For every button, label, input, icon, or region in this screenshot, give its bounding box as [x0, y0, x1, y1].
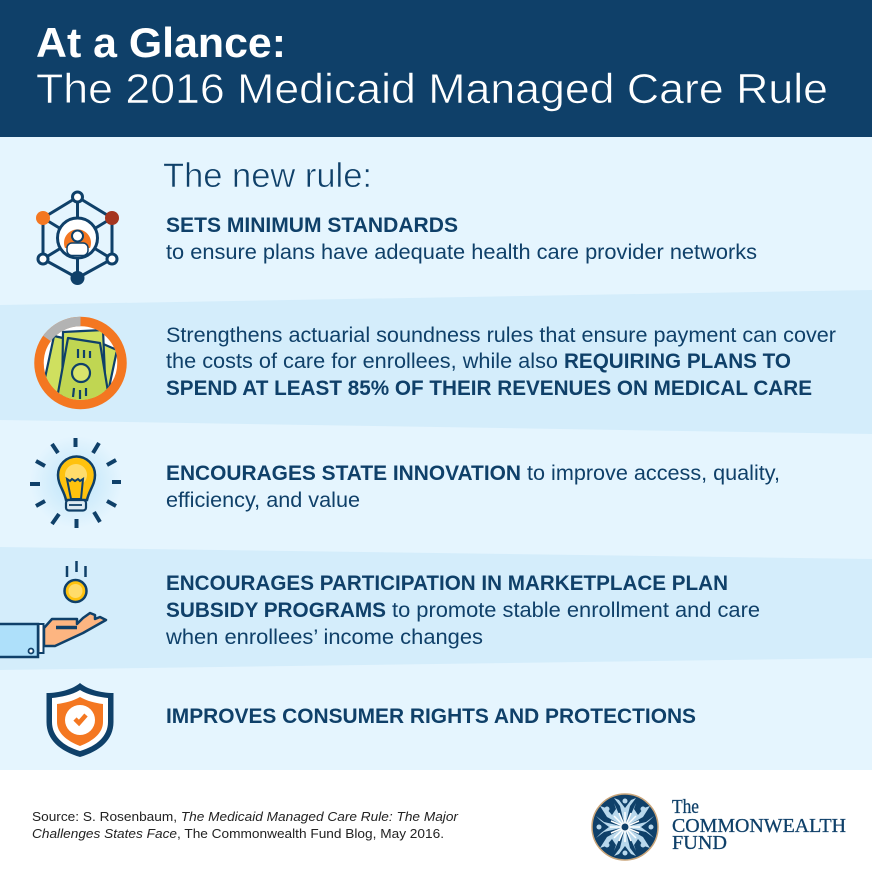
logo: The Commonwealth Fund [592, 794, 846, 860]
subheading: The new rule: [163, 157, 372, 195]
text: marketplace subsidy: when enrollees’ income changes [165, 626, 483, 649]
source note: Source: S. Rosenbaum, The Medicaid Managed Care Rule: The Major [32, 809, 459, 824]
icon: light bulb [30, 436, 122, 528]
footer background [0, 770, 872, 880]
title banner [0, 0, 872, 137]
text: marketplace subsidy: to promote stable enrollment and care [392, 599, 760, 622]
text: minimum standards: to ensure plans have adequate health care provider networks [166, 241, 757, 264]
band: row 4 background [0, 547, 872, 670]
text: consumer rights: IMPROVES CONSUMER RIGHTS AND PROTECTIONS [166, 705, 696, 728]
logo: The Commonwealth Fund: FUND [672, 832, 727, 854]
icon: coin over hand [0, 561, 106, 657]
source note: Challenges States Face , The Commonwealth Fund Blog, May 2016. [32, 826, 444, 841]
source note [32, 809, 459, 841]
text: minimum standards: SETS MINIMUM STANDARDS [166, 214, 458, 237]
text: marketplace subsidy: ENCOURAGES PARTICIPATION IN MARKETPLACE PLAN [166, 572, 728, 595]
page background [0, 137, 872, 770]
text: state innovation: to improve access, quality, [527, 462, 780, 485]
text: marketplace subsidy [165, 572, 760, 649]
text: minimum standards [166, 214, 757, 264]
band: row 2 background [0, 290, 872, 434]
text: actuarial soundness [166, 324, 836, 400]
icon: money in ring [39, 322, 122, 404]
text: state innovation: ENCOURAGES STATE INNOVATION [166, 462, 521, 485]
icon: network with person [36, 192, 119, 285]
logo: The Commonwealth Fund: COMMONWEALTH [672, 815, 846, 837]
title line 2: The 2016 Medicaid Managed Care Rule [36, 65, 828, 112]
text: actuarial soundness: the costs of care for enrollees, while also [166, 350, 558, 373]
text: state innovation [166, 462, 780, 512]
logo: The Commonwealth Fund: The [672, 796, 699, 818]
text: actuarial soundness: SPEND AT LEAST 85% OF THEIR REVENUES ON MEDICAL CARE [166, 377, 812, 400]
text: actuarial soundness: Strengthens actuarial soundness rules that ensure payment can cover [166, 324, 836, 347]
title line 1: At a Glance: [36, 19, 286, 66]
text: state innovation: efficiency, and value [166, 489, 360, 512]
text: actuarial soundness: REQUIRING PLANS TO [564, 350, 791, 373]
text: marketplace subsidy: SUBSIDY PROGRAMS [166, 599, 386, 622]
icon: shield with check [46, 683, 114, 757]
